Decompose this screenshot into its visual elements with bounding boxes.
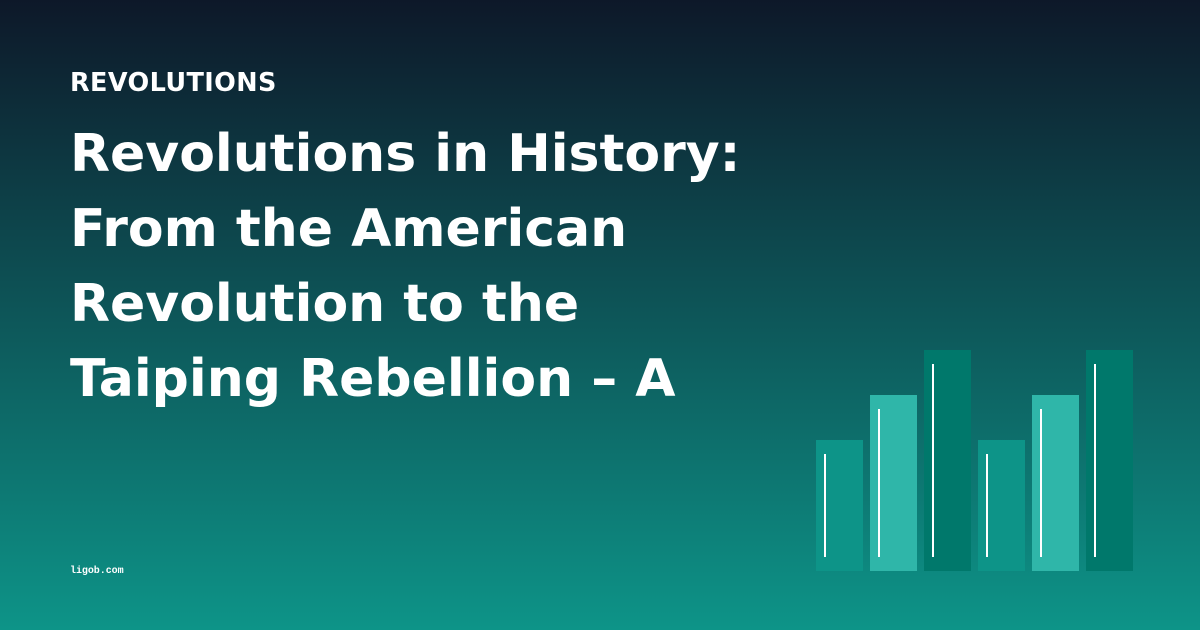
title: From the American xyxy=(70,199,627,259)
bar 4 xyxy=(978,440,1025,571)
title: Revolution to the xyxy=(70,274,579,334)
chart: decorative bars xyxy=(816,350,1133,571)
bar 2 xyxy=(870,395,917,571)
bar 1 xyxy=(816,440,863,571)
bar 3 xyxy=(924,350,971,571)
bar 6 xyxy=(1086,350,1133,571)
title: Taiping Rebellion – A xyxy=(70,349,676,409)
category label: REVOLUTIONS xyxy=(70,68,277,98)
bar 5 xyxy=(1032,395,1079,571)
site name: ligob.com xyxy=(70,566,124,577)
title xyxy=(70,124,740,409)
title: Revolutions in History: xyxy=(70,124,740,184)
